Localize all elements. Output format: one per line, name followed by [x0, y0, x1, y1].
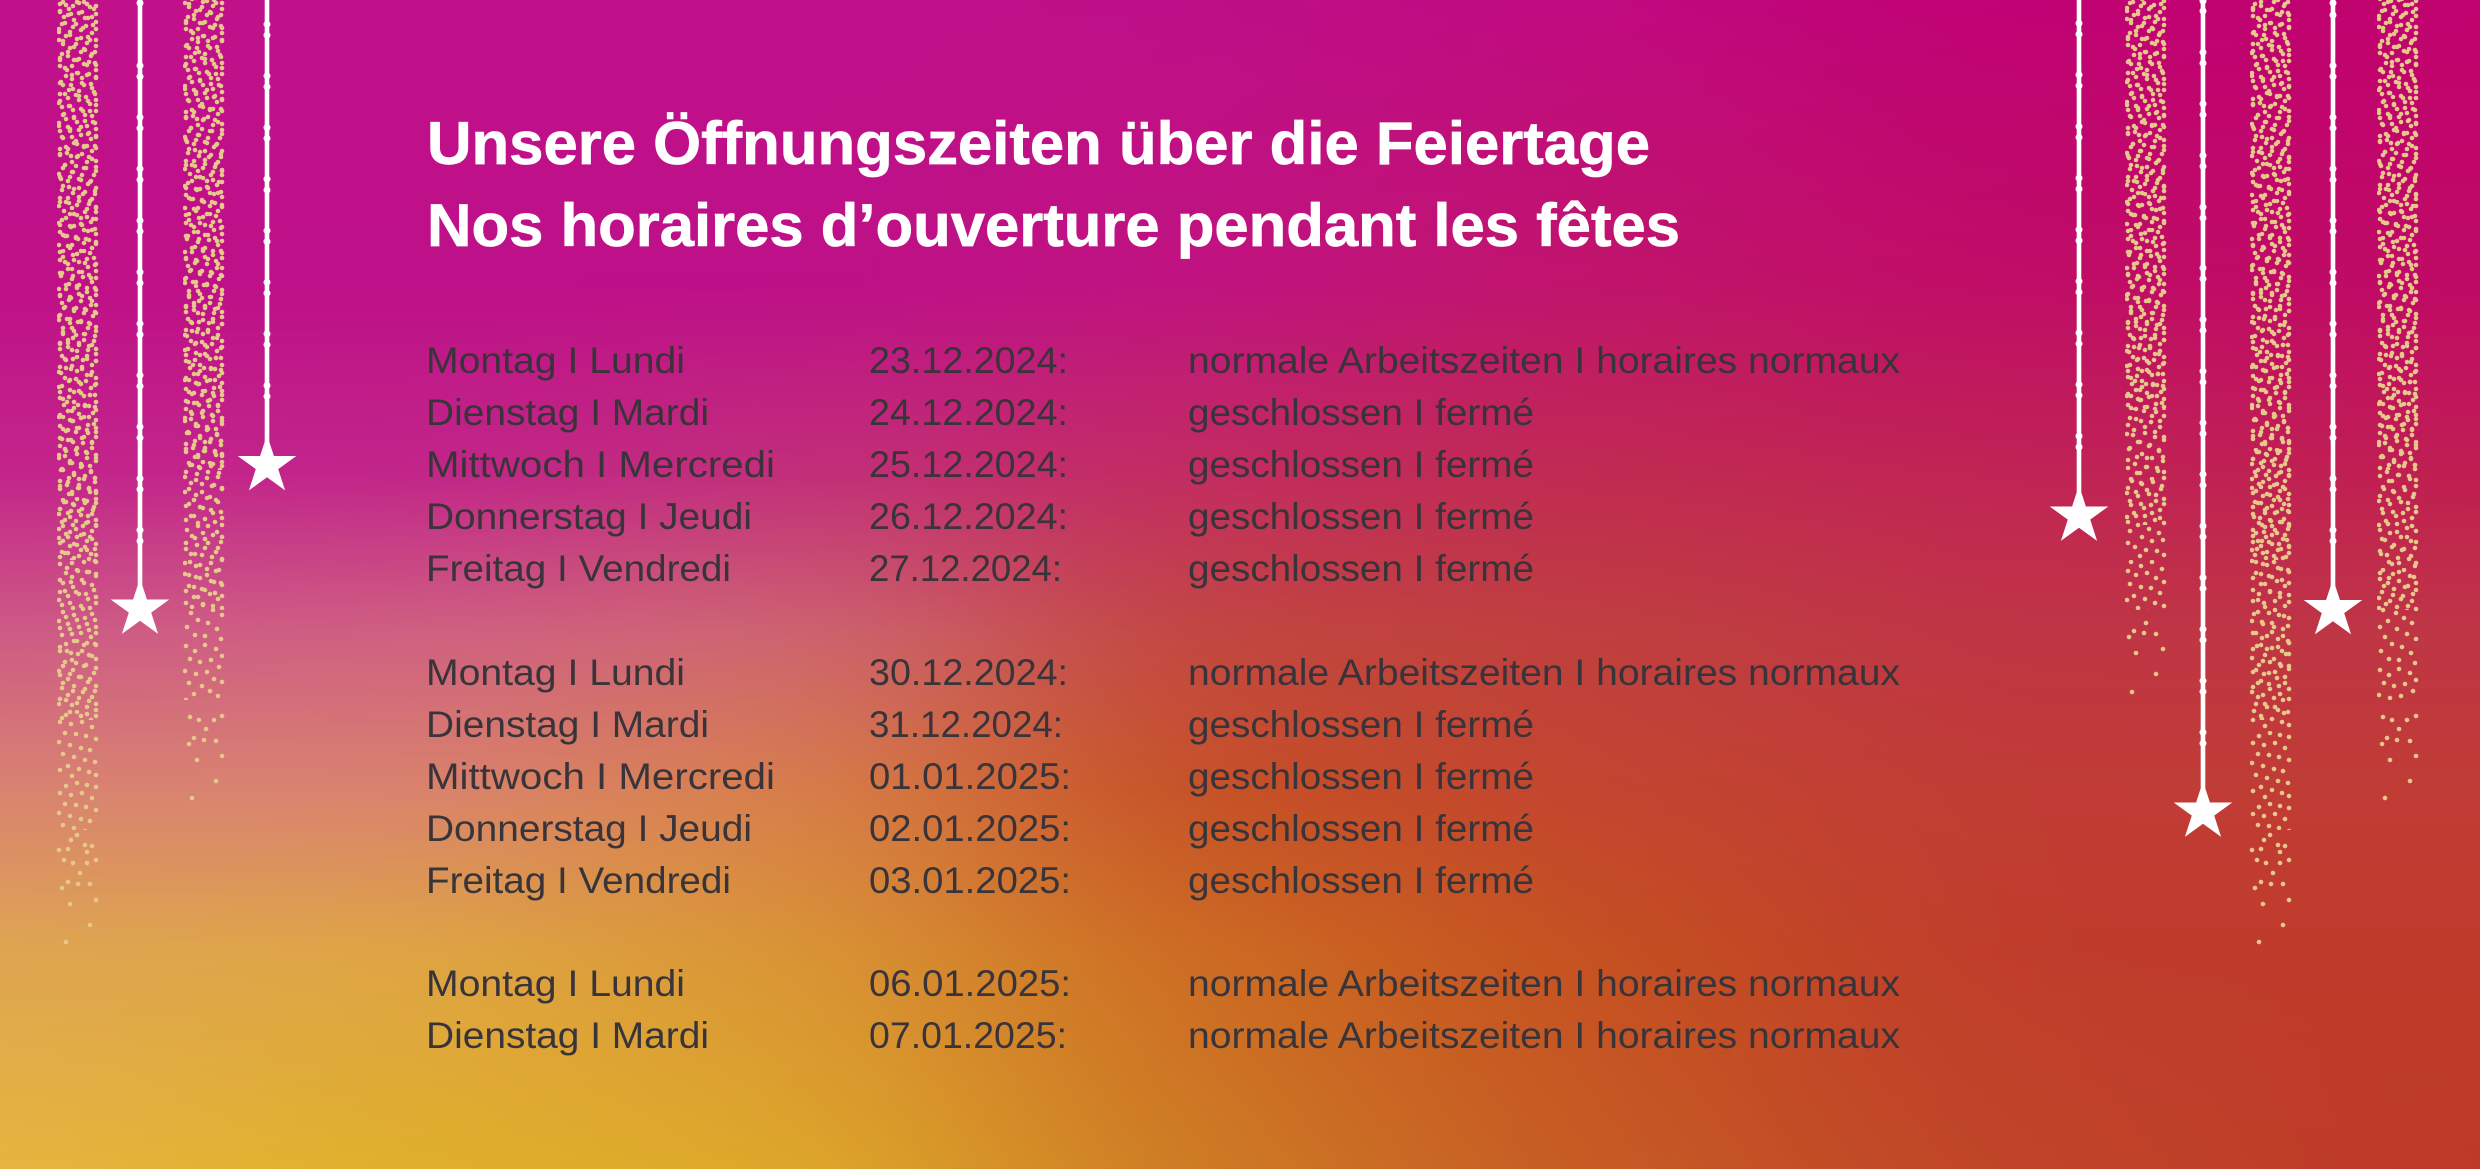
- row: Freitag 27.12.2024: Freitag I Vendredi: [426, 548, 731, 589]
- row: Montag 23.12.2024: normale Arbeitszeiten I horaires normaux: [1188, 340, 1901, 381]
- row: Montag 30.12.2024: Montag I Lundi: [426, 652, 685, 693]
- row: Freitag 27.12.2024: 27.12.2024:: [869, 548, 1062, 589]
- glitter column 4: [2250, 0, 2292, 942]
- row: Montag 06.01.2025: Montag I Lundi: [426, 963, 685, 1004]
- hanging star 1: [111, 0, 169, 634]
- schedule block: week of 30.12.2024: [426, 652, 1901, 901]
- hanging star 4: [2174, 0, 2232, 837]
- row: Montag 06.01.2025: [426, 963, 1901, 1004]
- hanging star 3: [2050, 0, 2108, 541]
- row: Freitag 03.01.2025: geschlossen I fermé: [1188, 860, 1534, 901]
- row: Dienstag 24.12.2024: Dienstag I Mardi: [426, 392, 709, 433]
- row: Montag 30.12.2024: [426, 652, 1901, 693]
- schedule block: week of 06.01.2025: [426, 963, 1901, 1056]
- row: Donnerstag 02.01.2025: 02.01.2025:: [869, 808, 1071, 849]
- row: Dienstag 07.01.2025: [426, 1015, 1901, 1056]
- glitter column 2: [183, 0, 225, 798]
- row: Donnerstag 26.12.2024: 26.12.2024:: [869, 496, 1068, 537]
- row: Dienstag 24.12.2024: geschlossen I fermé: [1188, 392, 1534, 433]
- row: Dienstag 07.01.2025: normale Arbeitszeiten I horaires normaux: [1188, 1015, 1901, 1056]
- row: Montag 23.12.2024: Montag I Lundi: [426, 340, 685, 381]
- row: Dienstag 24.12.2024: [426, 392, 1534, 433]
- row: Dienstag 07.01.2025: 07.01.2025:: [869, 1015, 1067, 1056]
- title: [427, 110, 1680, 259]
- title: Unsere Öffnungszeiten über die Feiertage: [427, 110, 1650, 177]
- row: Montag 30.12.2024: 30.12.2024:: [869, 652, 1068, 693]
- row: Montag 06.01.2025: 06.01.2025:: [869, 963, 1071, 1004]
- row: Mittwoch 01.01.2025: geschlossen I fermé: [1188, 756, 1534, 797]
- row: Donnerstag 26.12.2024: [426, 496, 1534, 537]
- glitter column 5: [2377, 0, 2419, 798]
- schedule block: week of 23.12.2024: [426, 340, 1901, 589]
- row: Montag 06.01.2025: normale Arbeitszeiten I horaires normaux: [1188, 963, 1901, 1004]
- row: Montag 23.12.2024: [426, 340, 1901, 381]
- row: Donnerstag 26.12.2024: Donnerstag I Jeudi: [426, 496, 752, 537]
- glitter column 3: [2125, 0, 2167, 692]
- row: Mittwoch 25.12.2024: geschlossen I fermé: [1188, 444, 1534, 485]
- hanging star 2: [238, 0, 296, 490]
- row: Mittwoch 01.01.2025: [426, 756, 1534, 797]
- row: Montag 23.12.2024: 23.12.2024:: [869, 340, 1068, 381]
- row: Dienstag 31.12.2024: Dienstag I Mardi: [426, 704, 709, 745]
- row: Freitag 03.01.2025: 03.01.2025:: [869, 860, 1071, 901]
- row: Freitag 27.12.2024: geschlossen I fermé: [1188, 548, 1534, 589]
- row: Dienstag 31.12.2024: [426, 704, 1534, 745]
- row: Dienstag 24.12.2024: 24.12.2024:: [869, 392, 1068, 433]
- row: Dienstag 31.12.2024: geschlossen I fermé: [1188, 704, 1534, 745]
- row: Mittwoch 25.12.2024: Mittwoch I Mercredi: [426, 444, 775, 485]
- row: Dienstag 31.12.2024: 31.12.2024:: [869, 704, 1063, 745]
- row: Mittwoch 25.12.2024: [426, 444, 1534, 485]
- row: Mittwoch 25.12.2024: 25.12.2024:: [869, 444, 1068, 485]
- hanging star 5: [2304, 0, 2362, 634]
- row: Mittwoch 01.01.2025: Mittwoch I Mercredi: [426, 756, 775, 797]
- row: Donnerstag 02.01.2025: Donnerstag I Jeudi: [426, 808, 752, 849]
- row: Freitag 27.12.2024: [426, 548, 1534, 589]
- row: Donnerstag 26.12.2024: geschlossen I fermé: [1188, 496, 1534, 537]
- row: Donnerstag 02.01.2025: [426, 808, 1534, 849]
- row: Mittwoch 01.01.2025: 01.01.2025:: [869, 756, 1071, 797]
- title: Nos horaires d’ouverture pendant les fêtes: [427, 192, 1680, 259]
- row: Dienstag 07.01.2025: Dienstag I Mardi: [426, 1015, 709, 1056]
- row: Montag 30.12.2024: normale Arbeitszeiten I horaires normaux: [1188, 652, 1901, 693]
- row: Donnerstag 02.01.2025: geschlossen I fermé: [1188, 808, 1534, 849]
- glitter column 1: [57, 0, 99, 942]
- row: Freitag 03.01.2025: [426, 860, 1534, 901]
- row: Freitag 03.01.2025: Freitag I Vendredi: [426, 860, 731, 901]
